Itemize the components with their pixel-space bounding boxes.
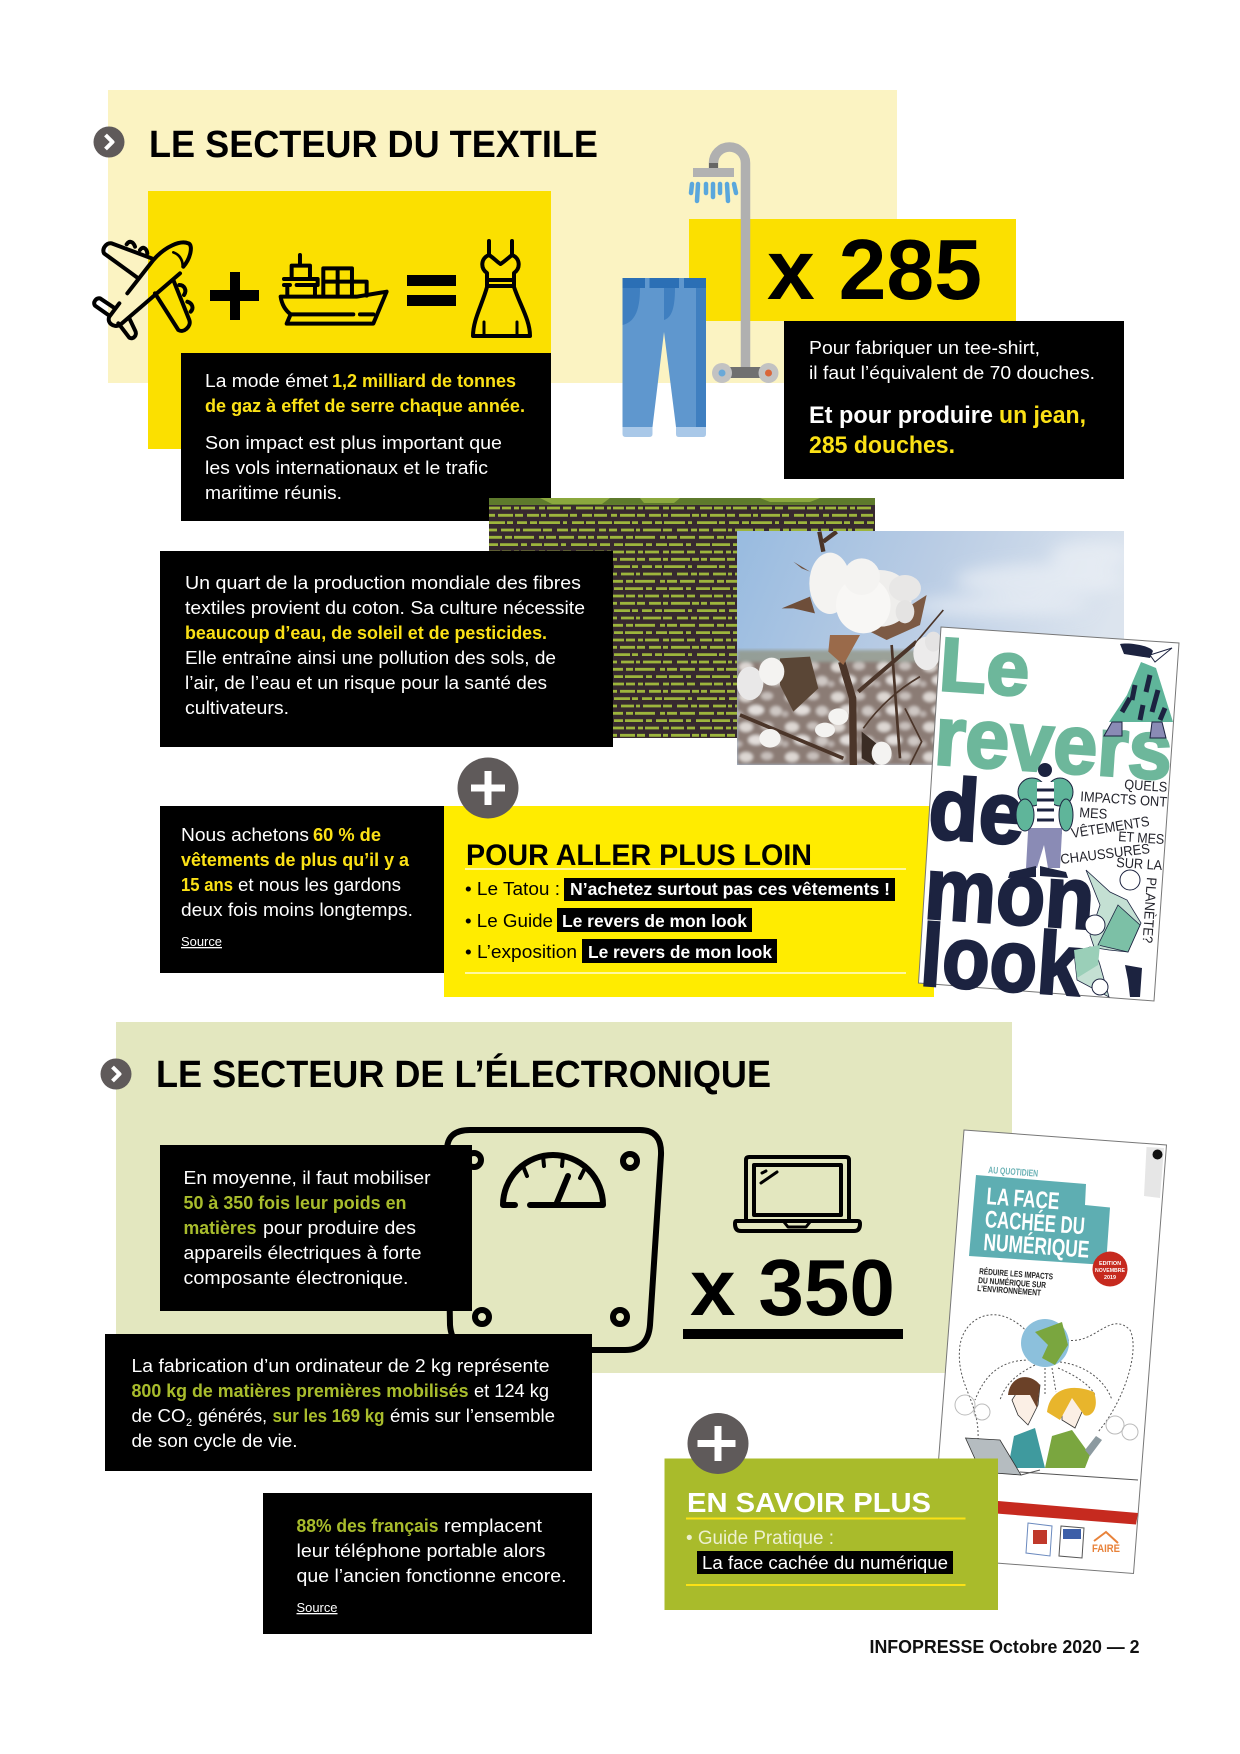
icon: plus circle textile	[458, 758, 518, 818]
guide subtitle: DU NUMÉRIQUE SUR	[978, 1275, 1046, 1290]
callout: materials weight	[160, 1145, 472, 1311]
callout: clothes purchases: et nous les gardons	[238, 874, 401, 895]
callout: computer manufacture: et 124 kg	[474, 1380, 549, 1401]
callout: shower comparison: Et pour produire	[809, 402, 993, 429]
guide title flag: CACHÉE DU	[984, 1205, 1086, 1240]
callout: computer manufacture: de son cycle de vie.	[132, 1430, 298, 1451]
callout: phone replacement: que l’ancien fonctionne encore.	[296, 1565, 566, 1586]
guide title flag	[969, 1175, 1110, 1265]
panel: textile background	[108, 90, 897, 383]
callout: phone replacement: 88% des français	[296, 1515, 438, 1536]
callout: materials weight: composante électronique.	[184, 1267, 408, 1288]
callout: materials weight: appareils électriques à forte	[184, 1242, 422, 1263]
icon: section bullet electronics	[100, 1058, 132, 1090]
panel: pour aller plus loin: • L’exposition	[465, 942, 577, 962]
callout: computer manufacture: 2	[186, 1417, 192, 1429]
callout: materials weight: pour produire des	[263, 1217, 416, 1238]
callout: computer manufacture: de CO	[132, 1405, 186, 1426]
panel: pour aller plus loin: N’achetez surtout pas ces vêtements !	[570, 879, 890, 899]
poster title: look	[918, 905, 1085, 1015]
icon: container ship	[281, 255, 387, 324]
heading: pour aller plus loin: POUR ALLER PLUS LOIN	[466, 839, 812, 872]
guide tab	[1144, 1147, 1164, 1198]
icon: weighing scale	[447, 1130, 661, 1350]
heading: en savoir plus: EN SAVOIR PLUS	[687, 1487, 931, 1518]
callout: fashion emissions: 1,2 milliard de tonnes	[332, 370, 516, 391]
callout: clothes purchases: Nous achetons	[181, 824, 309, 845]
panel: pour aller plus loin: Le revers de mon look	[588, 942, 772, 962]
callout: materials weight: En moyenne, il faut mobiliser	[184, 1167, 430, 1188]
callout: computer manufacture: La fabrication d’un ordinateur de 2 kg représente	[132, 1355, 550, 1376]
callout: fashion emissions: de gaz à effet de serre chaque année.	[205, 395, 525, 416]
poster title: mon	[922, 838, 1098, 948]
callout: phone replacement: Source	[296, 1600, 338, 1615]
guide illustration	[955, 1315, 1138, 1480]
callout: shower comparison: un jean,	[999, 402, 1086, 429]
poster title: Le	[937, 622, 1032, 713]
panel: pour aller plus loin	[444, 806, 934, 997]
callout: materials weight: 50 à 350 fois leur poids en	[184, 1192, 406, 1213]
callout: cotton production: l’air, de l’eau et un risque pour la santé des	[185, 672, 547, 693]
callout: computer manufacture: 800 kg de matières premières mobilisés	[132, 1380, 468, 1401]
icon: equals sign	[407, 275, 456, 306]
poster subtitle	[1059, 776, 1168, 944]
guide edition badge: EDITION	[1099, 1261, 1121, 1267]
callout: cotton production: beaucoup d’eau, de soleil et de pesticides.	[185, 622, 547, 643]
callout: shower comparison: il faut l’équivalent de 70 douches.	[809, 362, 1095, 383]
poster title	[918, 622, 1176, 1015]
guide logos: FAIRE	[1092, 1543, 1120, 1555]
image: guide la face cachée du numérique: AU QUOTIDIEN	[988, 1165, 1039, 1180]
poster title: revers	[932, 688, 1176, 798]
panel: pour aller plus loin: • Le Guide	[465, 911, 553, 931]
callout: computer manufacture: émis sur l’ensemble	[390, 1405, 555, 1426]
callout: fashion emissions: les vols internationaux et le trafic	[205, 457, 488, 478]
callout: fashion emissions: La mode émet	[205, 370, 328, 391]
photo: cotton field from above	[489, 498, 875, 738]
callout: fashion emissions	[181, 353, 551, 521]
guide subtitle	[977, 1266, 1054, 1298]
callout: computer manufacture: générés,	[198, 1405, 267, 1426]
panel: pour aller plus loin: • Le Tatou :	[465, 879, 560, 899]
callout: clothes purchases: vêtements de plus qu’il y a	[181, 849, 410, 870]
image: poster le revers de mon look	[918, 622, 1179, 1015]
poster subtitle: CHAUSSURES	[1059, 840, 1151, 867]
callout: clothes purchases: 15 ans	[181, 874, 233, 895]
image: guide la face cachée du numérique	[931, 1130, 1166, 1574]
callout: cotton production: Elle entraîne ainsi une pollution des sols, de	[185, 647, 556, 668]
panel: yellow emissions block	[148, 191, 551, 449]
callout: phone replacement: remplacent	[444, 1515, 542, 1536]
icon: plane	[94, 242, 192, 338]
callout: computer manufacture: sur les 169 kg	[272, 1405, 384, 1426]
statistic: x 350: x 350	[690, 1243, 895, 1332]
poster subtitle: MES	[1079, 804, 1108, 822]
guide edition badge: NOVEMBRE	[1095, 1268, 1125, 1274]
poster subtitle: IMPACTS ONT	[1080, 788, 1168, 810]
guide edition badge	[1092, 1252, 1128, 1286]
guide title flag: NUMÉRIQUE	[983, 1228, 1090, 1264]
icon: dress	[473, 241, 530, 336]
guide title flag: LA FACE	[986, 1183, 1060, 1215]
icon: jeans	[622, 278, 706, 437]
guide subtitle: L’ENVIRONNEMENT	[977, 1283, 1042, 1298]
callout: phone replacement: leur téléphone portable alors	[296, 1540, 546, 1561]
callout: clothes purchases: Source	[181, 934, 222, 949]
guide logos	[1026, 1523, 1120, 1558]
icon: shower	[691, 147, 778, 383]
callout: shower comparison	[784, 321, 1124, 479]
panel: yellow x 285: x 285	[767, 223, 982, 318]
photo: cotton boll	[737, 531, 1130, 765]
callout: fashion emissions: Son impact est plus important que	[205, 432, 502, 453]
callout: shower comparison: Pour fabriquer un tee-shirt,	[809, 337, 1040, 358]
callout: cotton production: textiles provient du coton. Sa culture nécessite	[185, 597, 585, 618]
callout: shower comparison: 285 douches.	[809, 432, 955, 459]
callout: materials weight: matières	[184, 1217, 256, 1238]
guide red band	[938, 1496, 1138, 1524]
callout: cotton production: cultivateurs.	[185, 697, 289, 718]
heading: le secteur du textile: LE SECTEUR DU TEXTILE	[149, 124, 598, 166]
poster title: de	[926, 758, 1028, 863]
panel: electronics background	[116, 1022, 1012, 1373]
panel: en savoir plus: La face cachée du numérique	[702, 1553, 948, 1573]
callout: clothes purchases: 60 % de	[313, 824, 381, 845]
guide edition badge: 2019	[1104, 1275, 1116, 1281]
panel: pour aller plus loin: Le revers de mon look	[562, 911, 747, 931]
icon: plus circle electronics	[688, 1413, 748, 1474]
icon: plus sign	[210, 272, 259, 320]
icon: section bullet textile	[94, 126, 124, 158]
poster subtitle: SUR LA	[1116, 854, 1163, 873]
poster subtitle: PLANÈTE?	[1140, 877, 1160, 944]
poster subtitle: ET MES	[1118, 828, 1165, 847]
callout: phone replacement	[263, 1493, 592, 1634]
callout: cotton production: Un quart de la production mondiale des fibres	[185, 572, 581, 593]
icon: laptop	[735, 1157, 860, 1231]
poster subtitle: QUELS	[1124, 776, 1168, 795]
panel: en savoir plus: • Guide Pratique :	[686, 1528, 834, 1549]
callout: clothes purchases	[160, 806, 444, 973]
callout: clothes purchases: deux fois moins longtemps.	[181, 899, 413, 920]
heading: le secteur de l'électronique: LE SECTEUR DE L’ÉLECTRONIQUE	[156, 1052, 771, 1096]
callout: computer manufacture	[105, 1334, 592, 1471]
panel: en savoir plus	[664, 1458, 998, 1610]
poster figures	[1008, 643, 1173, 997]
poster subtitle: VÊTEMENTS	[1070, 813, 1150, 841]
panel: yellow x 285	[689, 219, 1016, 321]
footer: page number: INFOPRESSE Octobre 2020 — 2	[870, 1637, 1140, 1657]
guide subtitle: RÉDUIRE LES IMPACTS	[979, 1266, 1054, 1281]
callout: cotton production	[160, 551, 613, 747]
callout: fashion emissions: maritime réunis.	[205, 482, 342, 503]
